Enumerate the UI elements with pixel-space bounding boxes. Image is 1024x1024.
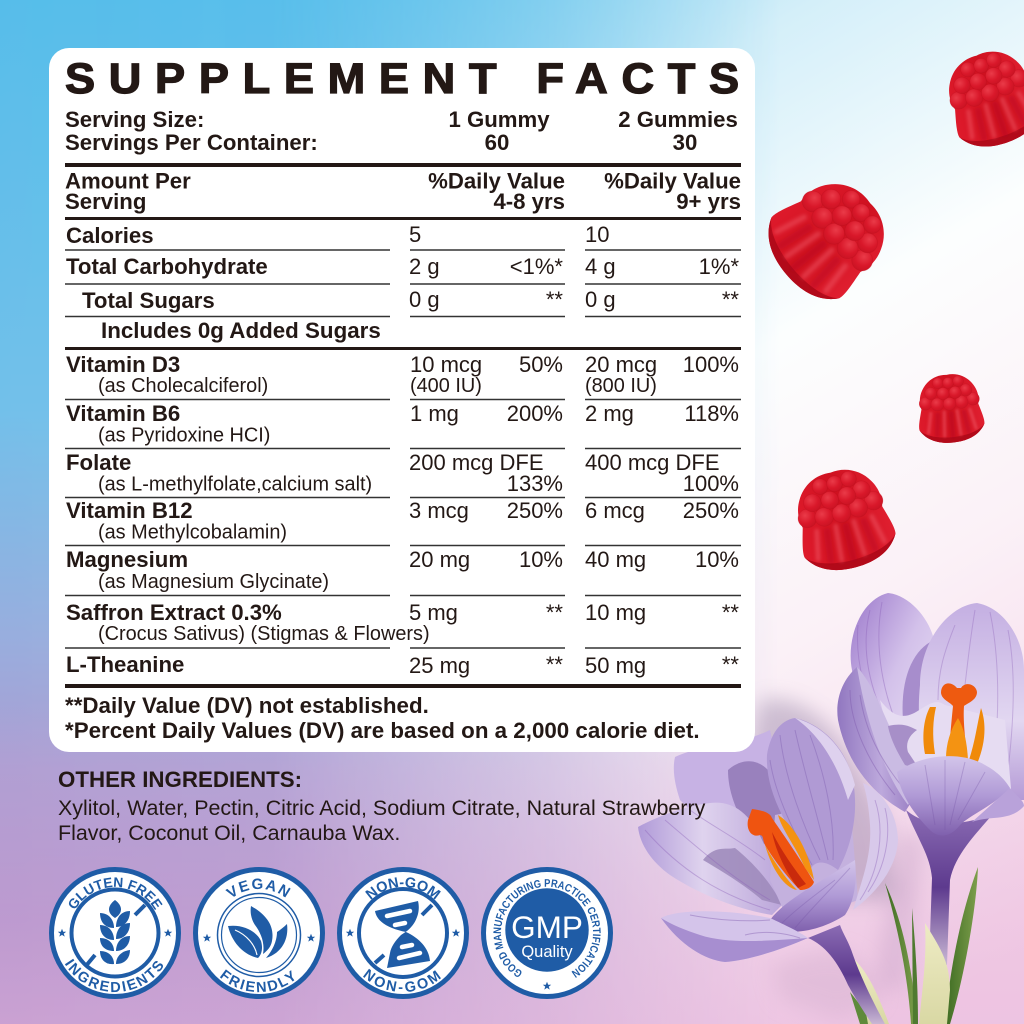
left flower: back petal — [674, 730, 800, 880]
row: vitamin D3 — [65, 352, 741, 400]
left flower: centre petal — [767, 718, 855, 870]
icon: leaves — [228, 906, 287, 958]
row: vitamin B6: 200% — [507, 401, 563, 426]
row: magnesium: 10% — [695, 547, 739, 572]
row: total sugars — [65, 287, 741, 316]
row: vitamin B6: 118% — [684, 401, 739, 426]
leaves — [850, 867, 978, 1024]
row: vitamin D3: 20 mcg — [585, 352, 657, 377]
row: total carbohydrate — [65, 254, 741, 284]
table header: %Daily Value — [604, 168, 741, 194]
row: L-theanine: ** — [722, 652, 739, 677]
footnotes: *Percent Daily Values (DV) are based on a 2,000 calorie diet. — [65, 718, 700, 743]
row: saffron extract: 5 mg — [409, 600, 458, 625]
row: vitamin D3: (400 IU) — [410, 375, 482, 397]
row: folate: 133% — [507, 471, 563, 496]
gummy: top right — [935, 40, 1024, 157]
footnotes: **Daily Value (DV) not established. — [65, 693, 429, 718]
badge: GMP quality: GMP — [511, 909, 583, 945]
row: magnesium: Magnesium — [66, 547, 188, 572]
icon: DNA hourglass — [375, 901, 430, 968]
row: calories: Calories — [66, 223, 154, 248]
table header: Serving — [65, 189, 146, 214]
sheaths — [855, 923, 950, 1024]
badge: gluten free: INGREDIENTS — [65, 958, 163, 992]
row: total carbohydrate: Total Carbohydrate — [66, 254, 268, 279]
serving info — [65, 107, 738, 155]
row: vitamin B12: 3 mcg — [409, 498, 469, 523]
row: calories: 10 — [585, 222, 609, 247]
right flower: back right petal — [919, 603, 1024, 800]
row: total carbohydrate: 1%* — [699, 254, 739, 279]
left flower: throat — [770, 800, 858, 925]
table header — [65, 163, 741, 220]
right flower: shadow on petal — [888, 725, 920, 770]
table header: Amount Per — [65, 168, 191, 194]
row: total sugars: 0 g — [409, 287, 440, 312]
left flower: bottom petal — [661, 911, 808, 962]
row: L-theanine: L-Theanine — [66, 652, 184, 677]
row: vitamin D3: 50% — [519, 352, 563, 377]
row: vitamin B12: (as Methylcobalamin) — [98, 522, 287, 544]
serving info: 1 Gummy — [448, 107, 550, 132]
left flower: front petal — [770, 860, 856, 932]
left flower: right curling petal — [853, 783, 898, 910]
row: folate: Folate — [66, 450, 131, 475]
row: total carbohydrate: 4 g — [585, 254, 616, 279]
row: folate: 400 mcg DFE — [585, 450, 720, 475]
other ingredients — [58, 767, 706, 845]
row: added sugars — [65, 318, 741, 350]
row: folate: 100% — [683, 471, 739, 496]
row: total sugars: ** — [722, 287, 739, 312]
table header: 9+ yrs — [676, 189, 741, 214]
badge: GMP quality: GOOD MANUFACTURING PRACTICE CERTIFICATION — [493, 879, 601, 978]
row: vitamin B12: 250% — [683, 498, 739, 523]
serving info: 30 — [673, 130, 697, 155]
row: calories — [65, 222, 741, 250]
row: vitamin B6: 1 mg — [410, 401, 459, 426]
row: added sugars: Includes 0g Added Sugars — [101, 318, 381, 343]
other ingredients: Xylitol, Water, Pectin, Citric Acid, Sodium Citrate, Natural Strawberry — [58, 796, 706, 820]
serving info: 60 — [485, 130, 509, 155]
row: vitamin B12: 250% — [507, 498, 563, 523]
gummy: lower — [785, 460, 902, 580]
right flower: left petal — [837, 667, 925, 812]
badge: gluten free: GLUTEN FREE — [68, 877, 162, 910]
row: magnesium: 10% — [519, 547, 563, 572]
row: vitamin B6: Vitamin B6 — [66, 401, 180, 426]
serving info: Serving Size: — [65, 107, 204, 132]
serving info: Servings Per Container: — [65, 130, 318, 155]
row: vitamin B12: 6 mcg — [585, 498, 645, 523]
badge: GMP quality: Quality — [521, 943, 573, 961]
badge: gluten free — [49, 867, 181, 999]
row: vitamin B6 — [65, 401, 741, 448]
left flower stem — [808, 925, 885, 1024]
row: folate — [65, 450, 741, 498]
row: vitamin D3: (800 IU) — [585, 375, 657, 397]
row: folate: (as L-methylfolate,calcium salt) — [98, 474, 372, 496]
row: L-theanine: 25 mg — [409, 653, 470, 678]
row: vitamin B12: Vitamin B12 — [66, 498, 193, 523]
row: saffron extract: 10 mg — [585, 600, 646, 625]
badge: non-GOM: NON-GOM — [363, 968, 441, 992]
right flower stem — [906, 810, 992, 965]
row: saffron extract: ** — [722, 600, 739, 625]
row: vitamin B12 — [65, 498, 741, 546]
row: total sugars: Total Sugars — [82, 288, 215, 313]
row: vitamin B6: 2 mg — [585, 401, 634, 426]
row: magnesium: (as Magnesium Glycinate) — [98, 571, 329, 593]
gummy: upper middle — [752, 163, 905, 315]
icon: wheat — [100, 900, 130, 964]
left flower: left petal — [638, 803, 782, 915]
badge: vegan friendly: VEGAN — [225, 878, 291, 898]
badge: non-GOM: NON-GOM — [365, 877, 441, 900]
right flower: stamens — [923, 683, 984, 764]
badge: non-GOM — [337, 867, 469, 999]
row: L-theanine: ** — [546, 652, 563, 677]
row: saffron extract: ** — [546, 600, 563, 625]
other ingredients: Flavor, Coconut Oil, Carnauba Wax. — [58, 821, 400, 845]
table header: %Daily Value — [428, 168, 565, 194]
row: L-theanine: 50 mg — [585, 653, 646, 678]
other ingredients: OTHER INGREDIENTS: — [58, 767, 302, 792]
row: L-theanine — [65, 652, 741, 688]
right flower: front petal — [897, 756, 1024, 835]
badge: vegan friendly — [193, 867, 325, 999]
right flower: throat — [880, 700, 1012, 805]
row: folate: 200 mcg DFE — [409, 450, 544, 475]
table header: 4-8 yrs — [493, 189, 565, 214]
footnotes — [65, 693, 700, 743]
row: magnesium: 40 mg — [585, 547, 646, 572]
row: saffron extract: (Crocus Sativus) (Stigmas & Flowers) — [98, 623, 430, 645]
badge: vegan friendly: FRIENDLY — [220, 969, 294, 992]
row: vitamin D3: 100% — [683, 352, 739, 377]
serving info: 2 Gummies — [618, 107, 738, 132]
row: vitamin D3: 10 mcg — [410, 352, 482, 377]
row: vitamin D3: Vitamin D3 — [66, 352, 180, 377]
row: total carbohydrate: <1%* — [510, 254, 563, 279]
row: total carbohydrate: 2 g — [409, 254, 440, 279]
panel: supplement facts — [49, 48, 755, 752]
row: magnesium — [65, 547, 741, 596]
illustration: saffron crocus flowers — [638, 593, 1024, 1024]
row: vitamin D3: (as Cholecalciferol) — [98, 375, 268, 397]
title: SUPPLEMENT FACTS — [65, 55, 739, 103]
row: vitamin B6: (as Pyridoxine HCI) — [98, 424, 270, 446]
row: saffron extract: Saffron Extract 0.3% — [66, 600, 282, 625]
left flower: shadow in petal — [728, 761, 790, 860]
row: total sugars: ** — [546, 287, 563, 312]
row: total sugars: 0 g — [585, 287, 616, 312]
badge: GMP quality — [481, 867, 613, 999]
row: magnesium: 20 mg — [409, 547, 470, 572]
row: saffron extract — [65, 600, 741, 648]
left flower: stamens — [748, 809, 814, 890]
right flower: back left petal — [851, 593, 940, 775]
row: calories: 5 — [409, 222, 421, 247]
gummy: small right — [914, 371, 986, 446]
